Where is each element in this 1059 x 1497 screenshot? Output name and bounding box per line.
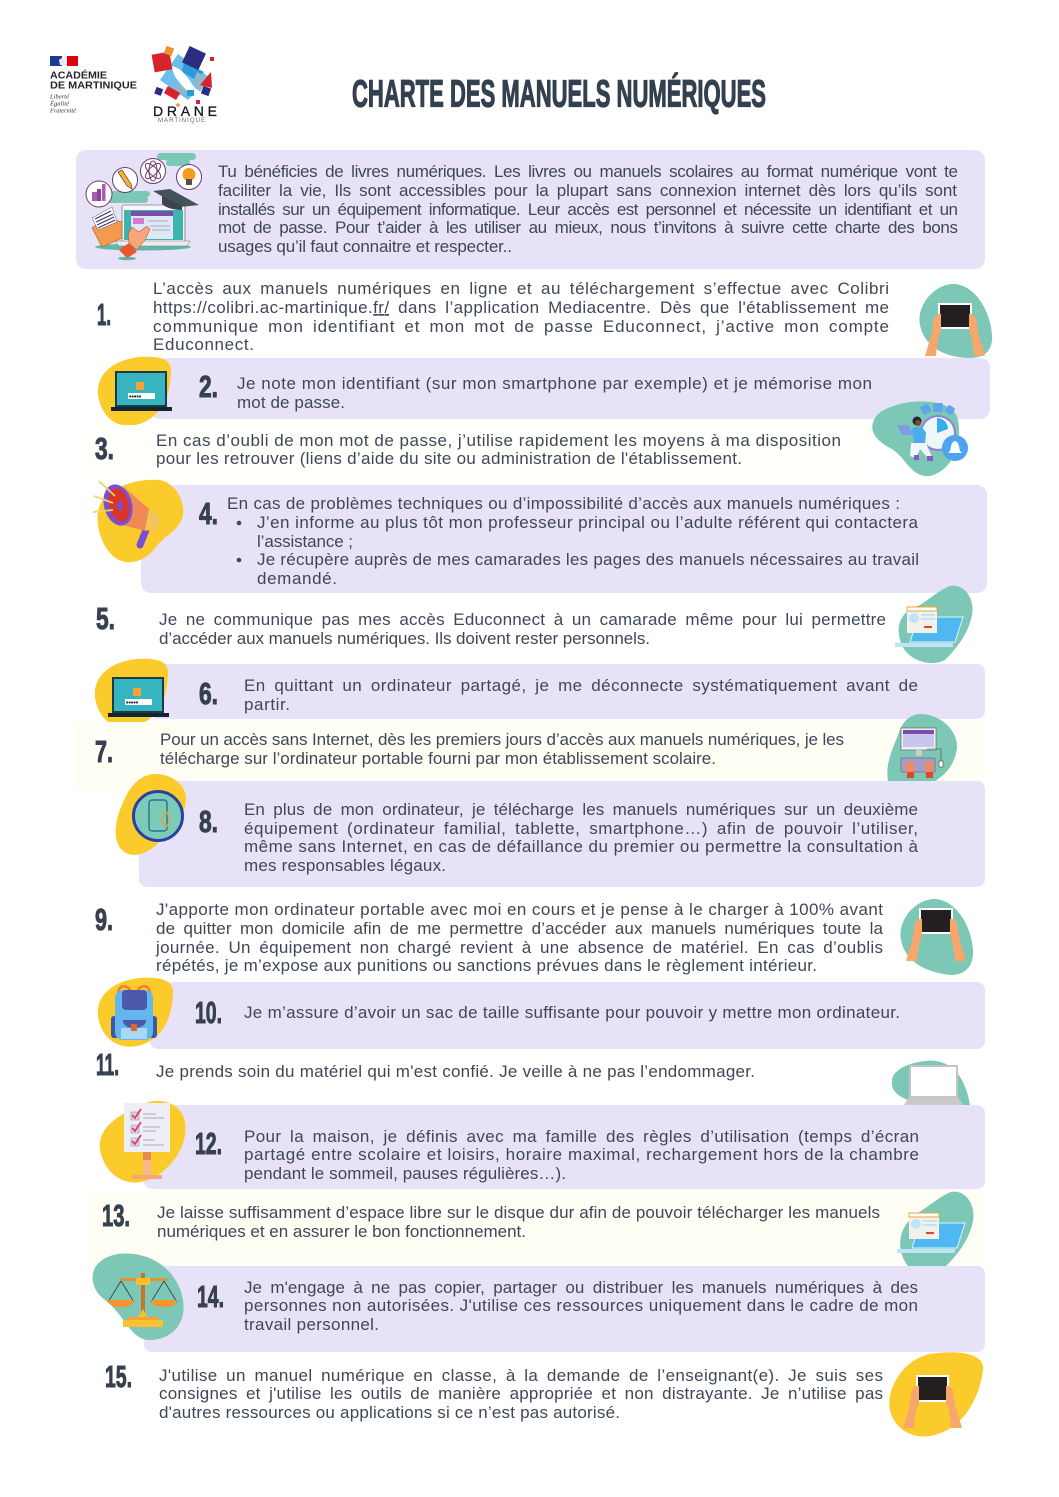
- number 10: 10.: [195, 995, 222, 1030]
- item 10: [98, 978, 985, 1049]
- number 11: 11.: [96, 1047, 119, 1082]
- item 12 text: partagé entre scolaire et loisirs, horaire maximal, rechargement hors de la chambre: [244, 1145, 919, 1164]
- item 4 text: J’en informe au plus tôt mon professeur principal ou l’adulte référent qui contactera: [257, 513, 919, 532]
- icon: person with stopwatch and bell on teal blob: [872, 401, 968, 476]
- item 1: [97, 279, 992, 358]
- icon: megaphone on yellow blob: [93, 480, 183, 562]
- item 12 text: [244, 1127, 919, 1183]
- item 5 text: d’accéder aux manuels numériques. Ils doivent rester personnels.: [159, 629, 650, 648]
- item 6: [95, 659, 985, 728]
- number 6: 6.: [199, 676, 218, 711]
- number 13: 13.: [102, 1198, 130, 1233]
- item 14: [93, 1253, 985, 1352]
- icon: laptop with password on yellow blob: [98, 357, 172, 426]
- number 8: 8.: [199, 804, 218, 839]
- item 8 text: mes responsables légaux.: [244, 856, 446, 875]
- item 5 text: [159, 610, 886, 648]
- item 6 text: [244, 676, 918, 714]
- row tint: [80, 425, 870, 481]
- item 11: [96, 1047, 970, 1105]
- item 9 text: répétés, je m’expose aux punitions ou sanctions prévues dans le règlement intérieur.: [156, 956, 817, 975]
- item 8 text: même sans Internet, en cas de défaillance du premier ou permettre la consultation à: [244, 837, 919, 856]
- item 4 text: [227, 494, 919, 588]
- item 2 text: Je note mon identifiant (sur mon smartphone par exemple) et je mémorise mon: [237, 374, 872, 393]
- panel background: [150, 664, 985, 719]
- item 2: [98, 357, 990, 426]
- item 15 text: [159, 1366, 883, 1422]
- item 9 text: journée. Un équipement non chargé revient à une absence de matériel. En cas d’oublis: [155, 938, 883, 957]
- intro text: Tu bénéficies de livres numériques. Les livres ou manuels scolaires au format numérique vont te: [218, 162, 958, 181]
- number 15: 15.: [105, 1359, 132, 1394]
- item 14 text: personnes non autorisées. J'utilise ces ressources uniquement dans le cadre de mon: [244, 1296, 918, 1315]
- item 3 text: [156, 431, 841, 468]
- panel background: [139, 781, 985, 887]
- panel background: [150, 358, 990, 419]
- number 5: 5.: [96, 601, 115, 636]
- item 2 text: [237, 374, 872, 412]
- item 4 text: l’assistance ;: [257, 532, 353, 551]
- item 13 text: Je laisse suffisamment d’espace libre sur le disque dur afin de pouvoir télécharger les manuels: [157, 1203, 880, 1222]
- item 10 text: Je m’assure d’avoir un sac de taille suffisante pour pouvoir y mettre mon ordinateur.: [244, 1003, 900, 1022]
- icon: laptop with password on yellow blob: •••••: [129, 394, 142, 401]
- item 9 text: [155, 900, 884, 975]
- icon: checklist board on yellow blob: [100, 1101, 186, 1183]
- icon: backpack on yellow blob: [98, 978, 173, 1047]
- number 14: 14.: [197, 1279, 224, 1314]
- icon: tablet held in hands on yellow blob: [889, 1352, 983, 1437]
- row tint: [90, 1190, 985, 1262]
- logo: DRANE Martinique: [152, 46, 217, 124]
- item 1 text: Educonnect.: [153, 335, 254, 354]
- number 4: 4.: [199, 496, 218, 531]
- item 15 text: d'autres ressources ou applications si ce n’est pas autorisé.: [159, 1403, 620, 1422]
- item 1 text: https://colibri.ac-martinique.fr/ dans l’application Mediacentre. Dès que l'établissement me: [153, 298, 889, 317]
- item 13 text: [157, 1203, 880, 1241]
- item 12 text: Pour la maison, je définis avec ma famille des règles d’utilisation (temps d’écran: [244, 1127, 919, 1146]
- item 1 text: [153, 279, 889, 354]
- number 9: 9.: [95, 902, 113, 937]
- logo: DRANE Martinique: DRANE: [153, 103, 217, 119]
- item 5: [96, 586, 973, 663]
- logo: Académie de Martinique: [49, 56, 137, 114]
- item 15: [105, 1352, 983, 1437]
- item 15 text: J'utilise un manuel numérique en classe, à la demande de l’enseignant(e). Je suis ses: [159, 1366, 883, 1385]
- item 4 text: Je récupère auprès de mes camarades les pages des manuels nécessaires au travail: [257, 550, 919, 569]
- item 8 text: [244, 800, 919, 875]
- icon: laptop on teal blob: [892, 1061, 970, 1105]
- item 8 text: En plus de mon ordinateur, je télécharge les manuels numériques sur un deuxième: [244, 800, 918, 819]
- item 1 text: communique mon identifiant et mon mot de passe Educonnect, j’active mon compte: [153, 317, 889, 336]
- item 3 text: pour les retrouver (liens d’aide du site ou administration de l'établissement.: [156, 449, 742, 468]
- item 13: [90, 1190, 985, 1266]
- icon: tablet held in hands on teal blob: [900, 899, 973, 975]
- item 7 text: [160, 730, 844, 768]
- item 13 text: numériques et en assurer le bon fonctionnement.: [157, 1222, 526, 1241]
- intro text: installés sur un équipement informatique. Leur accès est personnel et nécessite un identifiant et un: [218, 200, 958, 219]
- item 4 text: demandé.: [257, 569, 337, 588]
- item 14 text: [244, 1278, 918, 1334]
- item 14 text: travail personnel.: [244, 1315, 379, 1334]
- number 7: 7.: [95, 734, 113, 769]
- number 3: 3.: [95, 431, 114, 466]
- intro text: faciliter la vie, Ils sont accessibles pour la plupart sans connexion internet dès lors qu’ils sont: [218, 181, 957, 200]
- number 1: 1.: [97, 297, 111, 332]
- item 12 text: pendant le sommeil, pauses régulières…).: [244, 1164, 566, 1183]
- logo: Académie de Martinique: Liberté: [49, 94, 69, 100]
- item 7 text: Pour un accès sans Internet, dès les premiers jours d’accès aux manuels numériques, je les: [160, 730, 844, 749]
- item 9 text: de quitter mon domicile afin de me permettre d’accéder aux manuels numériques toute la: [156, 919, 884, 938]
- item 3: [80, 401, 968, 481]
- intro text: usages qu’il faut connaitre et respecter..: [218, 237, 512, 256]
- intro text: mot de passe. Pour t’aider à les utiliser au mieux, nous t’invitons à suivre cette charte des bons: [218, 218, 958, 237]
- item 2 text: mot de passe.: [237, 393, 345, 412]
- item 15 text: consignes et j'utilise les outils de manière appropriée et non distrayante. Je n’utilise pas: [159, 1384, 883, 1403]
- icon: smartphone in circle on yellow blob: [116, 774, 186, 855]
- item 8 text: équipement (ordinateur familial, tablette, smartphone…) afin de pouvoir l’utiliser,: [244, 819, 918, 838]
- item 6 text: partir.: [244, 695, 290, 714]
- panel background: [141, 485, 987, 593]
- icon: tablet held in hands on teal blob: [919, 284, 992, 358]
- item 9: [95, 899, 973, 975]
- item 1 text: L’accès aux manuels numériques en ligne et au téléchargement s’effectue avec Colibri: [153, 279, 889, 298]
- item 9 text: J'apporte mon ordinateur portable avec moi en cours et je pense à le charger à 100% avant: [156, 900, 883, 919]
- item 14 text: Je m'engage à ne pas copier, partager ou distribuer les manuels numériques à des: [244, 1278, 918, 1297]
- item 6 text: En quittant un ordinateur partagé, je me déconnecte systématiquement avant de: [244, 676, 918, 695]
- number 12: 12.: [195, 1126, 222, 1161]
- panel background: [144, 1266, 985, 1352]
- icon: laptop and web window on teal blob: [897, 1192, 974, 1266]
- number 2: 2.: [199, 369, 218, 404]
- item 11 text: Je prends soin du matériel qui m'est confié. Je veille à ne pas l’endommager.: [156, 1062, 755, 1081]
- item 12: [100, 1101, 985, 1189]
- icon: laptop and web window on teal blob: [895, 586, 973, 663]
- item 7: [75, 714, 985, 790]
- item 5 text: Je ne communique pas mes accès Educonnect à un camarade même pour lui permettre: [159, 610, 886, 629]
- title: CHARTE DES MANUELS NUMÉRIQUES: [352, 72, 766, 116]
- row tint: [75, 722, 985, 790]
- logo: DRANE Martinique: MARTINIQUE: [158, 118, 205, 124]
- item 3 text: En cas d’oubli de mon mot de passe, j’utilise rapidement les moyens à ma disposition: [156, 431, 841, 450]
- icon: scales of justice on teal blob: [93, 1253, 184, 1340]
- intro text: [218, 162, 958, 256]
- logo: Académie de Martinique: Fraternité: [49, 108, 76, 114]
- logo: Académie de Martinique: ACADÉMIE: [50, 68, 107, 82]
- item 4 text: En cas de problèmes techniques ou d’impossibilité d’accès aux manuels numériques :: [227, 494, 900, 513]
- icon: laptop with password on yellow blob: •••••: [126, 700, 139, 707]
- panel: introduction: [76, 150, 985, 269]
- item 8: [116, 774, 985, 887]
- item 4: [93, 480, 987, 593]
- icon: digital learning illustration: [86, 153, 202, 260]
- logo: Académie de Martinique: DE MARTINIQUE: [50, 80, 137, 92]
- panel background: [150, 982, 985, 1049]
- item 7 text: télécharge sur l’ordinateur portable fourni par mon établissement scolaire.: [160, 749, 716, 768]
- panel background: [144, 1105, 985, 1189]
- logo: Académie de Martinique: Égalité: [49, 100, 69, 108]
- icon: computer and keyboard on teal blob: [887, 714, 957, 781]
- icon: laptop with password on yellow blob: [95, 659, 169, 728]
